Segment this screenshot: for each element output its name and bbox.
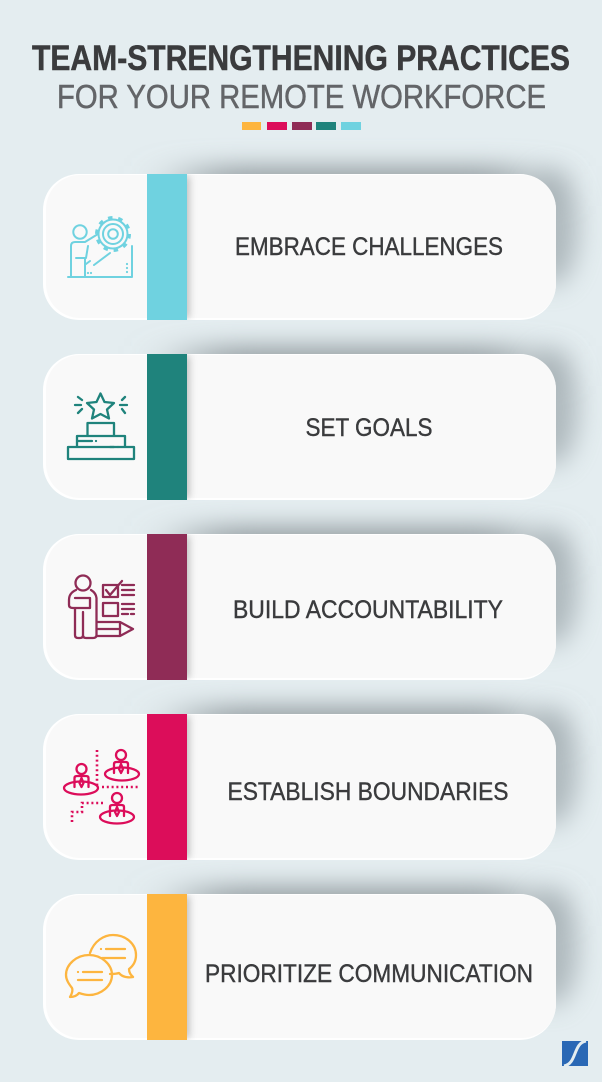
card shadows: [190, 166, 578, 1006]
label: ESTABLISH BOUNDARIES: [228, 778, 508, 806]
label: PRIORITIZE COMMUNICATION: [205, 960, 533, 988]
icon: person with checklist and pencil: [69, 576, 134, 638]
card 4: establish boundaries: [43, 714, 556, 860]
label: BUILD ACCOUNTABILITY: [233, 596, 503, 624]
card 2: set goals: [43, 354, 556, 500]
icon: speech bubbles: [66, 935, 136, 997]
card 1: embrace challenges: [43, 174, 556, 320]
icon: star on podium: [68, 394, 134, 459]
title: FOR YOUR REMOTE WORKFORCE: [57, 78, 546, 115]
label: SET GOALS: [306, 414, 432, 442]
icon: climber and gear: [68, 218, 132, 277]
label: EMBRACE CHALLENGES: [235, 233, 503, 261]
logo: [562, 1041, 588, 1066]
card 5: prioritize communication: [43, 894, 556, 1040]
title: [32, 39, 570, 115]
icon: separated people: [64, 750, 139, 824]
card 3: build accountability: [43, 534, 556, 680]
colour key bars: [242, 122, 361, 130]
